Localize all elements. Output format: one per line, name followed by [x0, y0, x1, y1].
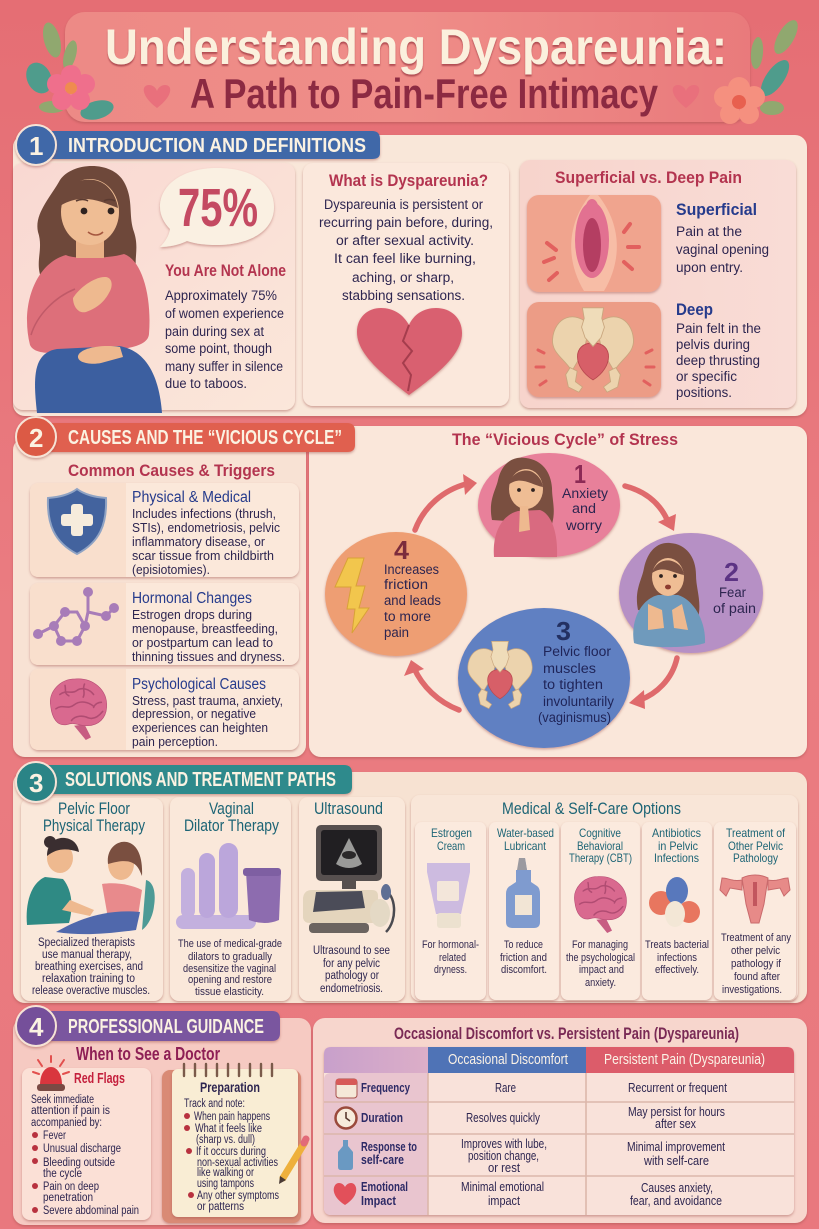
text: The use of medical-grade: [178, 938, 282, 950]
icon: calendar: [336, 1079, 357, 1098]
option: cognitive behavioral therapy: Therapy (CBT): [569, 851, 632, 865]
text: deep: [676, 321, 761, 400]
card title: Psychological Causes: [132, 676, 266, 693]
notepad text: If it occurs during: [196, 1146, 266, 1158]
option: cognitive behavioral therapy: [561, 822, 640, 1000]
column: persistent pain: with self-care: [643, 1154, 709, 1168]
column: persistent pain: [627, 1081, 727, 1208]
icon: pencil: [279, 1139, 306, 1184]
heading: [43, 800, 146, 835]
card text: inflammatory disease, or: [132, 535, 265, 549]
column: persistent pain: Minimal improvement: [627, 1140, 725, 1154]
heading: Physical Therapy: [43, 817, 146, 835]
text: tissue elasticity.: [195, 986, 264, 998]
option: antibiotics: effectively.: [655, 964, 699, 976]
text: statistic: [165, 288, 284, 391]
step text: friction: [384, 577, 428, 592]
heading: Superficial vs. Deep Pain: [555, 168, 742, 187]
option: treatment of other pelvic pathology: other pelvic: [731, 945, 780, 957]
step text: and: [572, 501, 596, 516]
option: treatment of other pelvic pathology: pathology if: [731, 958, 782, 970]
card text: thinning tissues and dryness.: [132, 650, 285, 664]
table: [324, 1047, 794, 1215]
column: occasional discomfort: Rare: [495, 1081, 516, 1095]
icon: clock: [336, 1108, 356, 1128]
diagram: deep: [527, 302, 661, 397]
card: medical and self-care options: [411, 795, 798, 1001]
option: estrogen cream: dryness.: [434, 964, 467, 976]
panel: superficial vs deep pain: [520, 160, 796, 408]
option: estrogen cream: Cream: [437, 839, 465, 853]
text: deep: positions.: [676, 385, 732, 400]
step 4: friction: [325, 532, 467, 656]
notepad text: non-sexual activities: [197, 1157, 278, 1169]
step text: to tighten: [543, 677, 603, 692]
column: persistent pain: Recurrent or frequent: [628, 1081, 727, 1095]
step text: Fear: [719, 585, 746, 600]
row labels: Frequency: [361, 1080, 411, 1095]
arrow: 4 to 1: [415, 474, 477, 530]
option: treatment of other pelvic pathology: Treatment of any: [721, 932, 791, 944]
heading: when to see a doctor: When to See a Doctor: [76, 1044, 220, 1064]
option: treatment of other pelvic pathology: investigations.: [722, 984, 782, 996]
step text: worry: [565, 518, 602, 533]
text: statistic: some point, though: [165, 341, 272, 356]
text: deep: deep thrusting: [676, 353, 760, 368]
figure: fearful woman: [633, 543, 705, 647]
definition text: [319, 197, 493, 303]
bullet list: Unusual discharge: [43, 1143, 121, 1155]
definition text: or after sexual activity.: [336, 233, 474, 248]
card: ultrasound: [299, 797, 405, 1001]
heading: Dilator Therapy: [184, 817, 280, 835]
card text: Stress, past trauma, anxiety,: [132, 694, 283, 708]
definition text: stabbing sensations.: [342, 288, 465, 303]
text: [178, 938, 282, 998]
card text: [132, 507, 280, 577]
section header 2: 2: [29, 423, 43, 453]
text: statistic: of women experience: [165, 306, 284, 321]
option: estrogen cream: related: [439, 952, 466, 964]
column: persistent pain: May persist for hours: [628, 1105, 725, 1119]
step text: of pain: [713, 601, 756, 616]
card title: Physical & Medical: [132, 489, 251, 506]
option: estrogen cream: For hormonal-: [422, 939, 479, 951]
section header 2: CAUSES AND THE “VICIOUS CYCLE”: [68, 427, 342, 449]
column: occasional discomfort: [461, 1081, 547, 1208]
card text: scar tissue from childbirth: [132, 549, 274, 563]
icon: shield: [48, 489, 106, 554]
step text: and leads: [384, 593, 441, 608]
card text: or postpartum can lead to: [132, 636, 273, 650]
step text: [713, 585, 756, 616]
arrow: 3 to 4: [404, 660, 459, 710]
row labels: Impact: [361, 1193, 397, 1208]
option: treatment of other pelvic pathology: [714, 822, 796, 1000]
icon: brain: [50, 679, 107, 740]
floral right: [714, 17, 802, 124]
text: use manual therapy,: [42, 949, 132, 961]
spiral binding: [184, 1064, 272, 1076]
column: occasional discomfort: position change,: [468, 1149, 539, 1163]
step number: 1: [574, 459, 586, 489]
section header 1: [16, 125, 380, 165]
notepad: preparation: [162, 1064, 306, 1223]
section header 1: INTRODUCTION AND DEFINITIONS: [68, 135, 366, 157]
text: statistic: many suffer in silence: [165, 359, 283, 374]
heading: [184, 800, 280, 835]
notepad text: using tampons: [197, 1178, 254, 1190]
column: persistent pain: Causes anxiety,: [641, 1181, 713, 1195]
row labels: self-care: [361, 1152, 404, 1167]
card text: [132, 694, 283, 749]
illustration: woman with hand on chest: [27, 166, 162, 413]
icon: heart: [334, 1183, 356, 1205]
title banner: [65, 12, 750, 122]
card text: Includes infections (thrush,: [132, 507, 276, 521]
text: desensitize the vaginal: [183, 963, 276, 975]
step text: [538, 644, 614, 725]
heading: Medical & Self-Care Options: [502, 800, 681, 818]
option: cognitive behavioral therapy: Behavioral: [577, 839, 623, 853]
step text: muscles: [543, 661, 596, 676]
card text: depression, or negative: [132, 707, 256, 721]
card: red flags: [22, 1056, 151, 1220]
label: superficial: Superficial: [676, 200, 757, 219]
definition text: recurring pain before, during,: [319, 215, 493, 230]
text: relaxation training to: [42, 973, 135, 985]
heading: Vaginal: [209, 800, 254, 818]
option: cognitive behavioral therapy: impact and: [579, 964, 624, 976]
notepad text: like walking or: [197, 1167, 254, 1179]
panel: common causes: [13, 438, 306, 757]
floral left: [21, 21, 116, 123]
text: superficial: upon entry.: [676, 260, 743, 275]
figure: worried woman: [491, 458, 557, 557]
option: water-based lubricant: To reduce: [504, 939, 543, 951]
arrow: 2 to 3: [629, 658, 677, 709]
text: deep: or specific: [676, 369, 737, 384]
label: deep: Deep: [676, 300, 713, 319]
card text: STIs), endometriosis, pelvic: [132, 521, 280, 535]
panel: you are not alone: [13, 163, 295, 413]
heading: common causes: Common Causes & Triggers: [68, 461, 275, 480]
step text: to more: [384, 609, 431, 624]
option: water-based lubricant: discomfort.: [501, 964, 547, 976]
icon: small heart right: [673, 85, 699, 108]
heading: vicious cycle: The “Vicious Cycle” of Stress: [452, 430, 678, 449]
column: occasional discomfort: or rest: [488, 1161, 520, 1175]
text: statistic: due to taboos.: [165, 376, 247, 391]
text: opening and restore: [188, 974, 272, 986]
notepad text: Any other symptoms: [197, 1190, 279, 1202]
text: deep: pelvis during: [676, 337, 750, 352]
section header 4: 4: [29, 1012, 44, 1042]
step 2: fear of pain: [619, 533, 763, 653]
heading: red flags: Red Flags: [74, 1070, 125, 1087]
section header 3: [16, 762, 352, 802]
option: cognitive behavioral therapy: the psychological: [566, 952, 635, 964]
text: pathology or: [325, 970, 379, 982]
step text: [384, 562, 441, 640]
text: endometriosis.: [320, 983, 383, 995]
option: treatment of other pelvic pathology: Other Pelvic: [728, 839, 783, 853]
heading: preparation: Preparation: [200, 1079, 260, 1095]
icon: lightning: [335, 558, 369, 633]
step text: Anxiety: [562, 486, 608, 501]
icon: siren: [33, 1056, 69, 1091]
section header 1: 1: [29, 131, 43, 161]
option: cognitive behavioral therapy: anxiety.: [585, 977, 616, 989]
option: antibiotics: infections: [657, 952, 697, 964]
heading: you are not alone: You Are Not Alone: [165, 261, 286, 280]
intro text: [31, 1094, 110, 1129]
text: [313, 945, 390, 995]
title line 2: A Path to Pain-Free Intimacy: [190, 70, 659, 117]
option: water-based lubricant: friction and: [500, 952, 547, 964]
bullet list: the cycle: [43, 1168, 82, 1180]
row labels: [361, 1080, 417, 1208]
section 1: introduction and definitions: [13, 125, 807, 416]
section header 4: PROFESSIONAL GUIDANCE: [68, 1016, 264, 1038]
illustration: dilators: [176, 843, 281, 929]
illustration: ultrasound machine: [303, 825, 394, 933]
row labels: Response to: [361, 1139, 417, 1154]
icon: small heart left: [144, 85, 170, 108]
step number: 3: [556, 616, 571, 646]
option: water-based lubricant: [489, 822, 559, 1000]
card text: menopause, breastfeeding,: [132, 622, 278, 636]
option: antibiotics: Antibiotics: [652, 826, 701, 840]
panel: comparison table: [313, 1018, 807, 1223]
text: Ultrasound to see: [313, 945, 390, 957]
text: Specialized therapists: [38, 937, 135, 949]
step text: involuntarily: [543, 694, 614, 709]
section 4: professional guidance: [13, 1006, 807, 1225]
card text: [132, 608, 285, 664]
bullet list: Bleeding outside: [43, 1157, 115, 1169]
icon: broken heart: [357, 308, 462, 395]
card text: Estrogen drops during: [132, 608, 252, 622]
option: cognitive behavioral therapy: Cognitive: [579, 826, 621, 840]
step number: 4: [394, 535, 410, 565]
notepad text: When pain happens: [194, 1111, 270, 1123]
text: deep: Pain felt in the: [676, 321, 761, 336]
step 3: pelvic floor: [458, 608, 630, 748]
table header: Persistent Pain (Dyspareunia): [604, 1051, 765, 1068]
heading: Ultrasound: [314, 800, 383, 818]
section header 2: [16, 417, 355, 457]
card text: pain perception.: [132, 735, 218, 749]
card text: (episiotomies).: [132, 563, 210, 577]
icon: pelvis: [468, 641, 532, 709]
notepad text: Track and note:: [184, 1098, 245, 1110]
text: for any pelvic: [323, 958, 380, 970]
heading: Pelvic Floor: [58, 800, 130, 818]
bullet list: Fever: [43, 1130, 66, 1142]
card text: experiences can heighten: [132, 721, 268, 735]
option: antibiotics: [642, 822, 712, 1000]
option: antibiotics: Infections: [654, 851, 699, 865]
section 2: causes and the vicious cycle: [13, 417, 807, 757]
column: persistent pain: fear, and avoidance: [630, 1194, 722, 1208]
step 1: anxiety and worry: [478, 453, 620, 557]
step text: Pelvic floor: [543, 644, 612, 659]
option: water-based lubricant: Water-based: [497, 826, 554, 840]
definition text: Dyspareunia is persistent or: [324, 197, 483, 212]
title line 1: Understanding Dyspareunia:: [105, 19, 727, 75]
intro text: accompanied by:: [31, 1117, 102, 1129]
text: release overactive muscles.: [32, 985, 150, 997]
heading: What is Dyspareunia?: [329, 171, 488, 190]
panel: what is dyspareunia: [303, 163, 509, 406]
row labels: Emotional: [361, 1179, 408, 1194]
option: estrogen cream: Estrogen: [431, 826, 472, 840]
card: hormonal changes: [30, 583, 299, 665]
column: occasional discomfort: Improves with lube,: [461, 1137, 547, 1151]
text: superficial: vaginal opening: [676, 242, 769, 257]
bullet list: [32, 1130, 139, 1217]
table header: [448, 1051, 765, 1068]
panel: when to see a doctor: [13, 1018, 311, 1225]
intro text: Seek immediate: [31, 1094, 94, 1106]
icon: molecule: [34, 588, 118, 644]
icon: bottle: [338, 1140, 353, 1170]
notepad text: or patterns: [197, 1201, 244, 1213]
speech bubble with 75%: 75%: [178, 178, 258, 238]
card: pelvic floor physical therapy: [21, 798, 163, 1001]
column: persistent pain: after sex: [655, 1117, 697, 1131]
arrow: 1 to 2: [625, 486, 676, 531]
diagram: superficial: [527, 195, 661, 292]
option: antibiotics: Treats bacterial: [645, 939, 709, 951]
option: treatment of other pelvic pathology: Pathology: [733, 851, 778, 865]
text: superficial: [676, 224, 769, 275]
text: [32, 937, 150, 997]
section 3: solutions and treatment paths: [13, 762, 807, 1003]
option: water-based lubricant: Lubricant: [504, 839, 547, 853]
option: treatment of other pelvic pathology: found after: [734, 971, 780, 983]
card: physical and medical: [30, 483, 299, 577]
speech bubble with 75%: [160, 168, 274, 247]
section header 4: [16, 1006, 280, 1046]
option: estrogen cream: [415, 822, 486, 1000]
option: antibiotics: in Pelvic: [658, 839, 698, 853]
text: breathing exercises, and: [35, 961, 143, 973]
row labels: Duration: [361, 1110, 403, 1125]
table header: Occasional Discomfort: [448, 1051, 569, 1068]
card title: Hormonal Changes: [132, 590, 252, 607]
option: cognitive behavioral therapy: For managing: [572, 939, 628, 951]
notepad text: [184, 1098, 279, 1213]
option: treatment of other pelvic pathology: Treatment of: [726, 826, 786, 840]
section header 3: 3: [29, 768, 43, 798]
notepad text: What it feels like: [195, 1123, 262, 1135]
intro text: attention if pain is: [31, 1105, 110, 1117]
definition text: It can feel like burning,: [334, 251, 476, 266]
panel: vicious cycle: [309, 426, 807, 757]
bullet list: penetration: [43, 1192, 93, 1204]
card: psychological causes: [30, 669, 299, 750]
column: occasional discomfort: Resolves quickly: [466, 1111, 541, 1125]
column: occasional discomfort: impact: [488, 1194, 520, 1208]
step number: 2: [724, 557, 739, 587]
text: statistic: pain during sex at: [165, 324, 264, 339]
bullet list: Severe abdominal pain: [43, 1205, 139, 1217]
text: dilators to gradually: [188, 951, 272, 963]
notepad text: (sharp vs. dull): [196, 1134, 255, 1146]
step text: pain: [384, 625, 409, 640]
text: statistic: Approximately 75%: [165, 288, 277, 303]
definition text: aching, or sharp,: [352, 270, 454, 285]
illustration: therapist and patient: [27, 836, 155, 934]
step text: [562, 486, 608, 533]
step text: (vaginismus): [538, 710, 611, 725]
text: superficial: Pain at the: [676, 224, 742, 239]
section header 3: SOLUTIONS AND TREATMENT PATHS: [65, 769, 336, 791]
bullet list: Pain on deep: [43, 1181, 99, 1193]
card: vaginal dilator therapy: [170, 797, 291, 1001]
column: occasional discomfort: Minimal emotional: [461, 1180, 544, 1194]
step text: Increases: [384, 562, 439, 577]
